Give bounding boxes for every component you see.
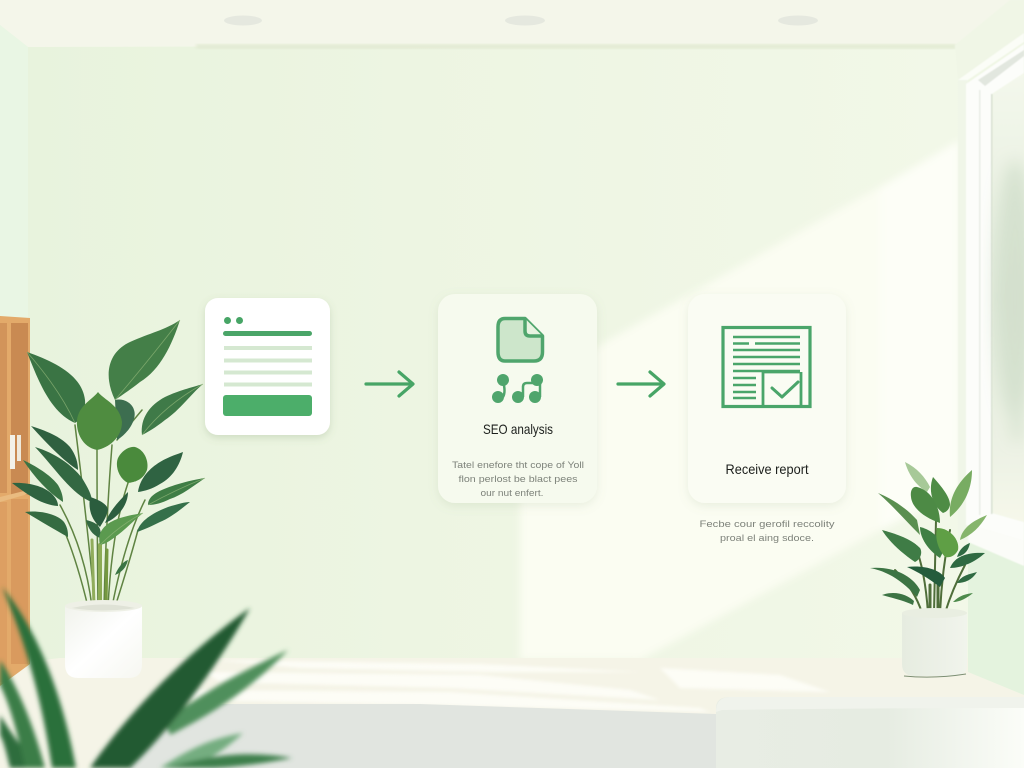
icon: document [498,318,542,361]
description: SEO analysis: Tatel enefore tht cope of Yoll [452,460,584,471]
form text lines [224,346,312,386]
arrow 1 [366,372,413,396]
right plant [870,462,987,613]
heading: receive report: Receive report [726,461,809,477]
bookshelf bracket [10,435,21,469]
form dots [224,317,243,324]
stems [895,520,965,613]
window sill [968,525,1024,566]
ceiling [0,0,1024,49]
back wall [28,45,968,665]
description: receive report: proal el aing sdoce. [720,533,814,544]
bookshelf [0,316,30,686]
right side wall below window [968,540,1024,695]
floor sunlight [190,660,830,712]
form button [223,395,312,416]
window glass with tree [993,73,1024,522]
leaf midribs [27,320,205,545]
floor [0,658,1024,768]
left plant pot [65,600,142,678]
leaves [870,462,987,605]
stems [60,410,145,607]
description: receive report [700,519,835,544]
leaves [12,320,205,575]
icon: report with check [723,328,810,407]
icon: music notes [492,374,543,403]
step 1 card: web form [205,298,330,435]
ceiling lights [224,16,818,26]
left plant [12,320,205,607]
right plant pot [902,608,967,677]
step 2 card: SEO analysis [438,294,597,503]
arrow 2 [618,372,664,396]
sunlight patch on wall [520,140,960,660]
foreground blurred plant [0,587,292,768]
window [955,0,1024,566]
heading: SEO analysis: SEO analysis [483,421,553,437]
step 3 card: receive report [688,294,846,503]
form title bar [223,331,312,336]
left side wall [0,25,28,320]
chair [716,697,1024,768]
description: SEO analysis: flon perlost be blact pees [458,474,578,485]
description: SEO analysis: our nut enfert. [480,488,544,499]
carpet [128,704,716,768]
description: SEO analysis [452,460,584,499]
description: receive report: Fecbe cour gerofil reccolity [700,519,835,530]
